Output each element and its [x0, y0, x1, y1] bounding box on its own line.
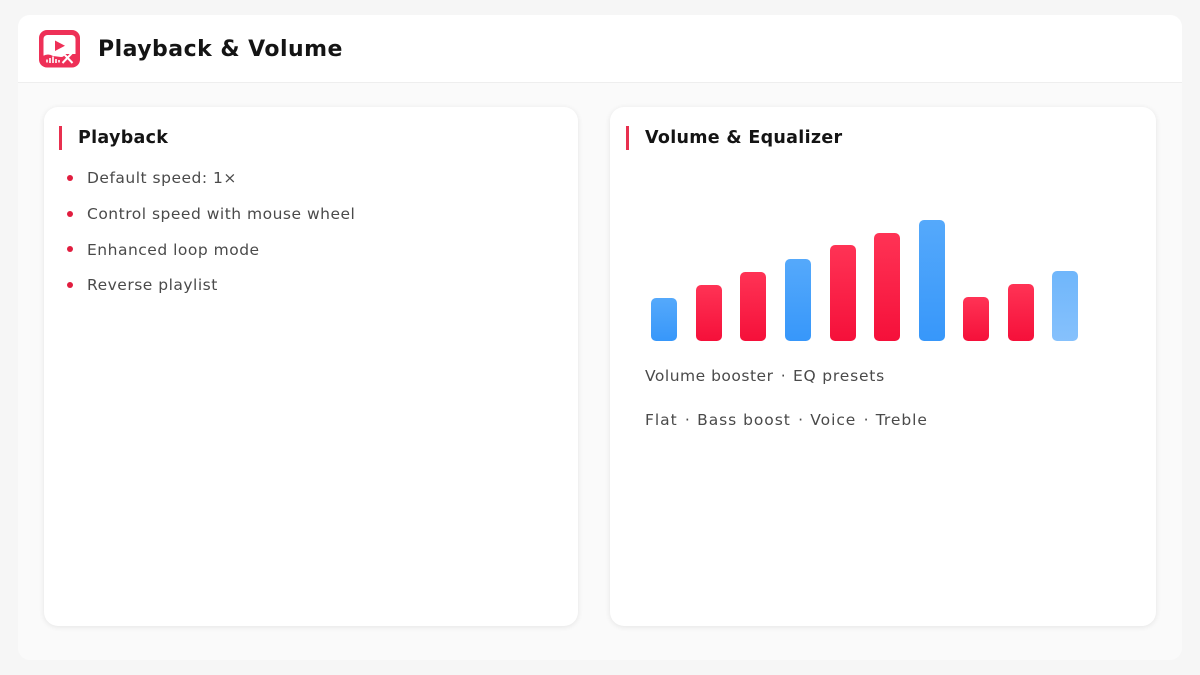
- panel: volume and equalizer: [610, 107, 1156, 626]
- text: equalizer presets: ·: [685, 411, 690, 429]
- header bar: [18, 15, 1182, 83]
- volume heading accent: [626, 126, 628, 150]
- icon: app logo: [39, 30, 80, 68]
- bullet list: playback features: Control speed with mouse wheel: [87, 205, 355, 223]
- bullet list: playback features: [67, 169, 355, 294]
- bullet list: playback features: Reverse playlist: [87, 276, 218, 294]
- text: equalizer presets: Flat Bass boost Voice Treble: [645, 411, 928, 429]
- text: volume options: Volume booster EQ presets: [645, 367, 885, 385]
- title: Playback & Volume: [98, 37, 343, 62]
- text: volume options: ·: [781, 367, 786, 385]
- text: equalizer presets: ·: [798, 411, 803, 429]
- panel: playback: [44, 107, 578, 626]
- bullet list: playback features: Default speed: 1×: [87, 169, 237, 187]
- bullet list: playback features: Enhanced loop mode: [87, 241, 260, 259]
- heading: playback: Playback: [78, 128, 168, 148]
- text: equalizer presets: ·: [864, 411, 868, 429]
- heading: volume and equalizer: Volume & Equalizer: [645, 128, 842, 148]
- playback heading accent: [59, 126, 62, 150]
- bar chart: equalizer: [651, 220, 1078, 341]
